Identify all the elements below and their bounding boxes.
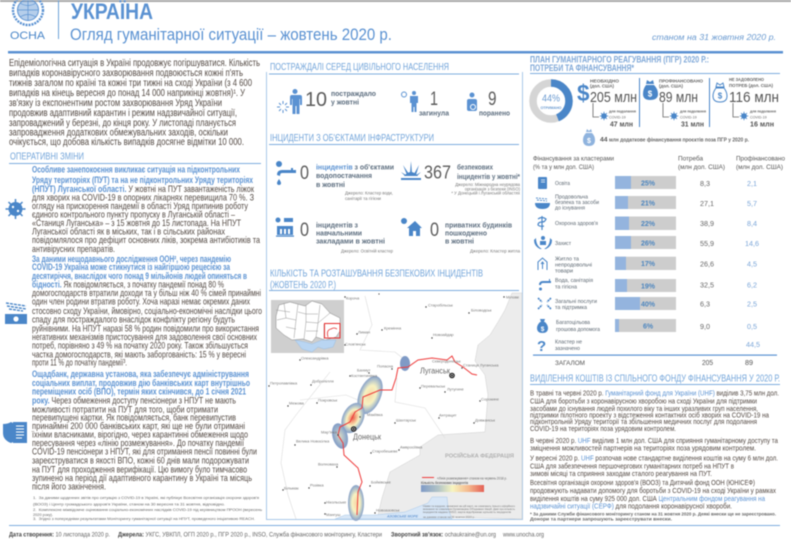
table row: education: Освіта xyxy=(555,181,570,187)
heading: HRP: ПОТРЕБИ ТА ФІНАНСУВАННЯ* xyxy=(530,63,634,73)
table row: cash: 6% xyxy=(643,324,654,330)
footnotes: (ВООЗ) і Центр громадського здоров'я України, станом на 30 вересня та 31 жовтня, відповідно. xyxy=(33,502,225,506)
additional funding note: $ xyxy=(587,138,591,145)
text block: pensions: переміщених осіб (ВПО), термін яких скінчився, до 1 січня 2021 xyxy=(32,387,246,397)
text block: covid xyxy=(32,164,261,254)
text block: economy xyxy=(32,254,262,367)
chart: funding donut: 44% xyxy=(542,92,560,104)
icon: shelter xyxy=(538,258,547,270)
map: city labels: Станиця Луганська xyxy=(463,362,499,368)
stat: required: 205 млн xyxy=(590,89,637,106)
text block: pooled fund: США для забезпечення першочергових гуманітарних потреб на НПУТ в xyxy=(530,461,734,470)
stat: 1 killed: загинула xyxy=(419,108,450,118)
table row: cash xyxy=(537,319,757,333)
map: city labels: Антрацит xyxy=(439,412,457,418)
icon: UN emblem xyxy=(13,0,43,25)
table row: shelter: 4,5 xyxy=(747,260,757,268)
icon: tap xyxy=(539,279,551,290)
map: sea of Azov xyxy=(335,497,452,519)
stat: required xyxy=(577,78,637,128)
panel: middle column frame xyxy=(266,72,522,520)
stat: funded: (дол. США) xyxy=(659,84,683,88)
text block: covid: антивірусних препаратів. xyxy=(32,244,115,254)
text block: pooled fund: COVID-19 на територіях поза урядовим контролем. xyxy=(530,424,676,433)
map: city labels: Лутугине xyxy=(447,386,464,392)
map: incident heat blobs xyxy=(329,356,410,521)
table row: cash: 0,5 xyxy=(747,322,757,331)
table row: unspecified: 44,5 xyxy=(746,340,760,349)
date: станом на 31 жовтня 2020 р. xyxy=(652,33,776,42)
header xyxy=(8,0,783,54)
map: city labels: Мар'їнка xyxy=(321,430,338,434)
stat: required: НЕОБХІДНО xyxy=(590,78,619,84)
table row: food security: 27,1 xyxy=(700,199,714,208)
map: Donetsk capital: Донецьк xyxy=(353,432,381,442)
table row: water and sanitation: 19% xyxy=(641,284,656,290)
table row: common services xyxy=(538,297,757,311)
table total: ЗАГАЛОМ xyxy=(555,360,585,367)
stat: water incidents: в жовтні xyxy=(316,180,345,189)
text block: pooled fund xyxy=(530,388,779,510)
stat: funded: ПРОФІНАНСОВАНО xyxy=(659,78,703,84)
stat: funded xyxy=(643,78,706,128)
table row: shelter: 17% xyxy=(641,261,656,268)
stat: school incidents: Джерело: Освітній кластер xyxy=(341,248,394,254)
table row: common services: 2,5 xyxy=(747,300,757,308)
table row: cash: Багатоцільова xyxy=(556,320,590,326)
text block: economy: потреб, порівняно з 49 % на початку 2020 року. Також збільшується xyxy=(32,341,248,351)
table row: health xyxy=(538,216,757,230)
text block: pensions: пересування через «лінію розмежування». До початку пандемії xyxy=(32,438,244,448)
stat: school incidents: закладами в жовтні xyxy=(316,236,385,246)
table row: shelter: непродовольчі xyxy=(555,262,592,268)
table row: health: 22% xyxy=(641,221,656,228)
map: city labels: Нікольське xyxy=(326,500,347,504)
intro paragraph: запроваджений у березні, до кінця року. У листопаді планується xyxy=(9,118,236,129)
OCHA logotype: OCHA xyxy=(10,30,46,42)
stat: school incidents: 0 xyxy=(300,220,309,241)
additional funding note xyxy=(583,129,750,146)
header rule xyxy=(8,51,783,54)
table row: unspecified xyxy=(537,338,760,355)
map: city labels: Більмак xyxy=(284,486,299,490)
heading: HRP xyxy=(530,51,780,74)
map: city labels: Макіївка xyxy=(367,412,383,417)
stat: 1 killed: 1 xyxy=(430,89,438,110)
table header xyxy=(533,154,785,171)
icon: question mark: ? xyxy=(537,338,546,355)
stat: 367 security incidents xyxy=(424,162,521,196)
map: Russia area xyxy=(378,293,522,519)
map: city labels: Розівка xyxy=(310,482,324,488)
map: city labels: Новоайдар xyxy=(433,332,454,337)
stat: water incidents: Джерело: Кластер води, xyxy=(345,190,393,196)
map: Donetsk capital xyxy=(351,426,381,442)
text block: pensions: зареєструватися в якості ВПО, кожні 60 днів мали подорожувати xyxy=(32,455,249,465)
footer: www.unocha.org xyxy=(502,532,544,538)
table total: 205 xyxy=(702,358,713,367)
table row: health: 38,9 xyxy=(700,219,714,228)
map: city labels: Слов'янськ xyxy=(345,342,366,346)
table row: protection: 26% xyxy=(641,240,656,248)
icon: cash bag xyxy=(537,319,548,333)
map: sea label: АЗОВСЬКЕ МОРЕ xyxy=(386,514,418,518)
table header: Потреба xyxy=(678,154,703,162)
text block: covid: Особливе занепокоєння викликає ситуація на підконтрольних xyxy=(32,164,240,174)
map: city labels: Межова xyxy=(289,400,305,406)
text block: economy: десятиріччя, внаслідок чого понад 9 мільйонів людей опиняться в xyxy=(32,271,247,281)
text block: economy: руйнівними. На НПУТ наразі 58 % родин повідомили про використання xyxy=(32,323,259,333)
map disclaimer: визнання чи схвалення Організацією Об'єднаних Націй. Дані про кількість xyxy=(423,507,516,511)
text block: covid: повідомлялося про дефіцит основних ліків, зокрема антибіотиків та xyxy=(32,235,261,245)
stat: houses damaged: 0 xyxy=(430,220,439,241)
table row: water and sanitation: Вода, санітарія xyxy=(555,278,593,284)
heading: infrastructure incidents: ІНЦИДЕНТИ З ОБ'ЄКТАМИ ІНФРАСТРУКТУРИ xyxy=(270,133,434,144)
table row: common services: 6,3 xyxy=(700,300,710,308)
icon: injured person xyxy=(277,89,302,114)
text block: pooled fund: В травні та червні 2020 р. Гуманітарний фонд для України (UHF) виділив 3,75 млн дол. xyxy=(530,388,779,398)
stat: 367 security incidents: 367 xyxy=(424,162,451,182)
footnote: donors: * За даними Служби фінансового моніторингу станом на 31 жовтня 2020 р. Деякі внески ще не зареєстровано. xyxy=(530,512,776,516)
icon: protection xyxy=(534,236,552,249)
stat: funded: для подолання xyxy=(680,110,706,114)
map: city labels: Короча xyxy=(346,296,360,300)
text block: pensions: зупинено на період дії адаптивного карантину в Україні та місяць xyxy=(32,473,252,483)
stat: unmet: 116 млн xyxy=(729,89,779,106)
table row: education xyxy=(538,176,757,189)
intro paragraph: тижнів загалом по країні та кожні три тижні на сході України (з 4 600 xyxy=(9,78,252,89)
stat: unmet: НЕ ЗАДОВОЛЕНО xyxy=(729,77,764,82)
table header: (% та у млн дол. США) xyxy=(533,164,594,171)
text block: pensions: перевипущені картки. Як повідомляється, банк перевипустив xyxy=(32,413,236,423)
stat: required: COVID-19 xyxy=(609,116,626,120)
map: city labels: Перевальськ xyxy=(421,384,445,388)
table row: health: Охорона здоров'я xyxy=(555,221,598,227)
text block: pensions: COVID-19 пенсіонери з НПУТ, які для отримання пенсії повинні були xyxy=(32,447,257,457)
intro paragraph: зв'язку із експонентним ростом захворювання Уряд України xyxy=(9,98,222,109)
map: city labels: Сєвєродонецьк xyxy=(432,358,461,364)
stat: 10 injured xyxy=(305,89,377,111)
table row: education: 8,3 xyxy=(700,179,710,188)
text block: pensions: соціальних виплат, продовжив дію банківських карт внутрішньо xyxy=(32,378,250,388)
stat: water incidents: санітарії та гігієни xyxy=(345,196,382,201)
table header: (млн дол. США) xyxy=(678,164,725,171)
heading: civilian casualties: ПОСТРАЖДАЛІ СЕРЕД ЦИВІЛЬНОГО НАСЕЛЕННЯ xyxy=(270,62,449,73)
map: city labels: Старобільськ xyxy=(428,302,453,308)
table row: food security: 5,7 xyxy=(747,199,757,208)
table row: food security: до існування xyxy=(555,206,585,212)
stat: water incidents: 0 xyxy=(300,163,309,184)
text block: pensions: на ПУТ для проходження верифікації. Цю вимогу було тимчасово xyxy=(32,464,247,474)
intro paragraph: Епідеміологічна ситуація в Україні продовжує погіршуватися. Кількість xyxy=(9,58,260,69)
stat: 9 wounded xyxy=(479,89,511,118)
heading: map: КІЛЬКІСТЬ ТА РОЗТАШУВАННЯ БЕЗПЕКОВИХ ІНЦИДЕНТІВ xyxy=(270,268,483,280)
map: city labels: Бахмут xyxy=(357,368,371,372)
footer: Джерела: УКГС, УВКПЛ, ОГП 2020 р., ПГР 2020 р., INSO, Служба фінансового моніторингу, Кластери xyxy=(118,530,382,538)
additional funding note: 44 xyxy=(600,136,608,144)
stat: unmet xyxy=(713,77,779,128)
intro paragraph xyxy=(9,58,260,148)
intro paragraph: очікується, що добова кількість випадків досягне відмітки 10 000. xyxy=(9,137,244,148)
subtitle: Огляд гуманітарної ситуації – жовтень 2020 р. xyxy=(70,25,392,44)
table row: protection: Захист xyxy=(555,241,571,247)
icon: food bowl xyxy=(535,198,550,209)
stat: houses damaged: приватних будинків xyxy=(445,220,513,230)
table row: food security xyxy=(535,194,757,212)
map: city labels: Біловодськ xyxy=(471,308,492,312)
footnotes: 2. Комплексне міжвідомче оцінювання соціально-економічних наслідків COVID-19 під керівництвом ПРООН (вересень xyxy=(33,507,262,512)
intro paragraph: випадків на кінець вересня до понад 14 000 наприкінці жовтня)¹. У xyxy=(9,88,246,99)
icon: house xyxy=(401,218,422,236)
text block: pooled fund: зимові місяці та сприяння заходам сталого реагування на ПУТ. xyxy=(530,469,712,478)
icon: book xyxy=(538,177,547,189)
stat: 367 security incidents: організація з безпеки (INSO) xyxy=(465,186,521,192)
text block: economy: негативних механізмів пристосування для задоволення свої основних xyxy=(32,332,257,342)
table row: protection xyxy=(534,236,759,249)
table row: cash: 9,0 xyxy=(700,322,710,331)
text block: economy: частка домогосподарств, які мають заборгованість: 15 % у вересні xyxy=(32,349,246,359)
stat: required: (дол. США) xyxy=(590,84,614,88)
footer: Дата створення: 10 листопада 2020 р. xyxy=(9,532,110,538)
text block: pensions: року. Через обмеження доступу пенсіонери з НПУТ не мають xyxy=(32,395,236,405)
icon: water tap xyxy=(276,161,296,185)
stat: 9 wounded: 9 xyxy=(488,89,496,110)
icon: money bag: $ xyxy=(648,90,653,98)
stat: water incidents: водопостачання xyxy=(316,171,372,180)
table row: food security: Продовольча xyxy=(555,194,588,200)
text block: pooled fund: надзвичайні ситуації (СЕРФ) для подолання коронавірусної хвороби. xyxy=(530,501,732,510)
stat: funded: 89 млн xyxy=(659,89,698,106)
table row: water and sanitation: 6,2 xyxy=(747,280,757,290)
icon: security incident burst xyxy=(401,161,421,180)
icon: wounded person xyxy=(467,92,477,111)
icon: school xyxy=(276,218,294,237)
table row: unspecified: Кластер не xyxy=(555,340,582,346)
stat: school incidents: інцидентів з xyxy=(316,220,358,230)
table header: (млн дол. США) xyxy=(736,164,783,171)
table row: shelter: Житло та xyxy=(555,256,579,262)
table row: common services: Загальні послуги xyxy=(555,299,597,305)
text block: pooled fund: виділення коштів на суму 925 000 дол. США Центральним фондом реагування на xyxy=(530,494,766,503)
heading: map xyxy=(269,268,519,291)
map disclaimer: за даними станом на 31 жовтня 2020 р. xyxy=(423,515,475,519)
text block: economy: домогосподарств втратили доходи та у більш ніж 40 % сімей принаймні xyxy=(32,288,261,298)
table row: water and sanitation: 32,5 xyxy=(700,280,714,290)
stat: required: 47 млн xyxy=(610,122,633,128)
stat: houses damaged: в жовтні xyxy=(445,236,474,246)
text block: economy: стосовно сходу України, ймовірно, соціально-економічні наслідки цього xyxy=(32,306,262,316)
heading: HRP: ПЛАН ГУМАНІТАРНОГО РЕАГУВАННЯ (ПГР) 2020 Р.: xyxy=(530,54,709,64)
text block: covid: Луганської області як в міських, так і в сільських районах xyxy=(32,227,225,237)
text block: economy: проти 11 % до початку пандемії³. xyxy=(32,357,127,367)
stat: 367 security incidents: * У Донецькій і Луганській областях xyxy=(451,190,521,196)
stat: houses damaged xyxy=(430,220,521,254)
text block: covid: єдиного контрольного пункту пропуску в Луганській області – xyxy=(32,210,236,220)
table header: Фінансування за кластерами xyxy=(533,154,614,162)
stat: funded: 31 млн xyxy=(681,122,704,128)
map disclaimer: інцидентів надано INSO; карта відображає щільність інцидентів xyxy=(423,510,512,514)
map legend: «Лінія розмежування» станом на червень 2018 р. xyxy=(437,476,507,480)
intro paragraph: випадків коронавірусного захворювання подвоюється кожні п'ять xyxy=(9,68,243,79)
table row: food security: безпека та засоби xyxy=(555,200,599,206)
stat: 10 injured: у жовтні xyxy=(331,98,359,106)
chart: funding donut xyxy=(533,83,569,119)
chart: funding donut: ОТРИМАНО xyxy=(541,106,562,110)
intro paragraph: запровадження додаткових обмежувальних заходів, оскільки xyxy=(9,128,228,138)
table row: water and sanitation: та гігієна xyxy=(555,284,577,290)
table row: cash: грошова допомога xyxy=(556,327,600,333)
stat: unmet: COVID-19 xyxy=(750,116,767,120)
icon: dollar: $ xyxy=(577,80,590,106)
inset map: Ukraine xyxy=(271,300,344,353)
intro paragraph: продовжив адаптивний карантин і режим надзвичайної ситуації, xyxy=(9,108,237,119)
footnotes xyxy=(33,495,262,521)
text block: economy: один член родини втратив роботу. Хоча наразі немає окремих даних xyxy=(32,297,250,307)
map: city labels: Мангуш xyxy=(326,512,340,517)
icon: virus xyxy=(6,199,26,219)
icon: outlined money bag: $ xyxy=(718,92,723,100)
text block: pensions: їхніми власниками, вірогідно, через карантинні обмеження щодо xyxy=(31,430,248,440)
heading: map: (ЖОВТЕНЬ 2020 Р.) xyxy=(270,280,336,291)
map: city labels: Петропавлівка xyxy=(270,380,298,386)
map legend: Кількість безпекових інцидентів xyxy=(421,481,469,485)
map: city labels: Волноваха xyxy=(318,462,339,466)
map: city labels: Бойківське xyxy=(371,480,392,484)
additional funding note: млн додаткове фінансування проєктів поза ПГР у 2020 р. xyxy=(609,136,750,144)
table row: shelter xyxy=(538,256,757,274)
stat: 10 injured: 10 xyxy=(305,89,327,111)
map: city labels: Олександрівка xyxy=(301,356,329,360)
map: city labels: Старобешеве xyxy=(372,448,398,454)
stat: 9 wounded: поранено xyxy=(479,108,511,118)
table row: common services: 40% xyxy=(641,302,656,308)
map: city labels: Кремінна xyxy=(384,326,402,330)
text block: covid: (НПУТ) Луганської області. У жовтні на ПУТ завантаженість ліжок xyxy=(32,184,255,194)
map: city labels: Довжанськ xyxy=(475,418,495,422)
stat: unmet: 16 млн xyxy=(750,122,774,128)
stat: houses damaged: Джерело: Кластер житла xyxy=(470,248,521,254)
table row: education: 2,1 xyxy=(747,179,757,188)
map disclaimer: Назви та кордони, зазначені на цій карті, не означають їхнього офіційного xyxy=(423,504,515,508)
heading: operational changes: ОПЕРАТИВНІ ЗМІНИ xyxy=(10,152,84,162)
table total: 89 xyxy=(745,358,753,367)
stat: unmet: ПОТРЕБ (дол. США) xyxy=(729,83,773,88)
footer: Зворотний зв'язок: ochaukraine@un.org xyxy=(391,530,496,538)
map: city labels: Новоазовськ xyxy=(376,508,400,512)
text block: economy: бідності. Як повідомляється, з початку пандемії понад 80 % xyxy=(32,280,224,290)
text block: covid: для хворих на COVID-19 в опорних лікарнях перевищила 70 %. З xyxy=(32,192,254,202)
map: city labels: Сорокине xyxy=(481,396,500,402)
table row: shelter: товари xyxy=(555,268,573,274)
icon: money xyxy=(5,303,27,324)
stat: 10 injured: постраждало xyxy=(331,89,377,98)
stat: 367 security incidents: безпекових xyxy=(457,162,493,172)
map: Luhansk capital: Луганськ xyxy=(420,366,450,376)
footnote: donors: Донори та партнери запрошують зареєструвати внески. xyxy=(530,516,672,522)
map: city labels: Попасна xyxy=(377,364,394,368)
icon: cash bag: $ xyxy=(541,326,545,333)
map: Russia label: РОСІЙСЬКА ФЕДЕРАЦІЯ xyxy=(445,452,514,460)
table row: shelter: 26,6 xyxy=(700,260,714,268)
text block: pensions xyxy=(31,369,257,492)
stat: 367 security incidents: Джерело: Міжнародна неурядова xyxy=(455,182,521,187)
text block: covid: огляду на прискорення пандемії в області Уряд припинив роботу xyxy=(32,201,248,211)
footnotes: 1. За даними щоденних звітів про ситуацію з COVID-19 в Україні, які публікує Всесвітня організація охорони здоров'я xyxy=(33,495,259,500)
map: line of contact xyxy=(338,356,477,515)
text block: pooled fund: зміцнення можливостей партнерів на територіях поза урядовим контролем. xyxy=(530,443,756,452)
map: city labels: Велика Новосілка xyxy=(296,438,330,444)
stat: water incidents xyxy=(300,162,394,201)
stat: water incidents: інцидентів з об'єктами xyxy=(316,162,394,172)
text block: economy: COVID-19 Україна може стикнутися із найгіршою рецесією за xyxy=(32,262,231,272)
text block: economy: За даними нещодавнього дослідження ООН², через пандемію xyxy=(32,254,231,264)
text block: economy: спаду для постраждалого внаслідок конфлікту регіону будуть xyxy=(32,315,235,325)
stat: unmet: для подолання xyxy=(750,110,776,114)
table row: health: 8,4 xyxy=(747,219,757,228)
table row: protection: 55,9 xyxy=(700,239,714,248)
table row: protection: 14,6 xyxy=(745,239,759,248)
map disclaimer xyxy=(423,504,516,519)
icon: caduceus xyxy=(538,216,546,230)
logo divider xyxy=(58,0,59,39)
map: city labels: Амвросіївка xyxy=(400,444,423,450)
map: city labels: Мілове xyxy=(506,294,520,300)
table row: food security: 21% xyxy=(641,200,656,208)
text block: covid: Уряду територіях (ПУТ) та на не підконтрольних Уряду територіях xyxy=(32,175,253,185)
footer xyxy=(9,525,780,538)
stat: school incidents: навчальними xyxy=(316,228,362,238)
icon: arrows xyxy=(538,298,551,309)
stat: houses damaged: пошкоджено xyxy=(445,228,488,238)
footnotes: 3. Згідно з попередніми результатами Моніторингу гуманітарної ситуації на НПУТ, проведеного ініціативою REACH. xyxy=(33,516,255,521)
table row: common services: та підтримка xyxy=(555,305,587,311)
map: city labels: Костянтинівка xyxy=(351,373,378,378)
table row: education: 25% xyxy=(641,180,656,188)
stat: 1 killed xyxy=(419,89,450,118)
stat: required: для подолання xyxy=(609,110,636,114)
map legend xyxy=(421,476,507,492)
map: city labels: Шахтарськ xyxy=(396,418,416,422)
map: city labels: Добропілля xyxy=(312,378,334,384)
top page shadow xyxy=(0,0,791,2)
text block: pensions: принаймні 200 000 банківських карт, які ще не були отримані xyxy=(32,421,245,431)
map: security incidents xyxy=(268,293,522,521)
table header: Профінансовано xyxy=(736,154,785,162)
icon: killed person xyxy=(402,91,418,112)
table row: water and sanitation xyxy=(539,278,757,292)
footnote: donors xyxy=(530,512,776,522)
text block: pensions: після його закінчення. xyxy=(32,482,106,492)
table row: unspecified: зазначено xyxy=(555,346,580,352)
stat: 367 security incidents: інцидентів у жовтні* xyxy=(457,172,520,181)
map: city labels xyxy=(268,293,520,517)
icon: shield and document xyxy=(3,422,27,443)
text block: pensions: Ощадбанк, державна установа, яка забезпечує адміністрування xyxy=(32,369,249,379)
map: city labels: Лиман xyxy=(358,330,370,334)
footnotes: 2020 року). xyxy=(33,512,53,517)
table total xyxy=(533,354,777,367)
map: city labels: Покровськ xyxy=(318,398,337,402)
stat: school incidents xyxy=(300,220,394,254)
text block: covid: «Станиця Луганська» – з 15 жовтня до 15 листопада. На НПУТ xyxy=(32,218,241,228)
text block: pensions: можливості потратити на ПУТ для того, щоби отримати xyxy=(32,404,218,414)
stat: funded: COVID-19 xyxy=(680,116,697,120)
